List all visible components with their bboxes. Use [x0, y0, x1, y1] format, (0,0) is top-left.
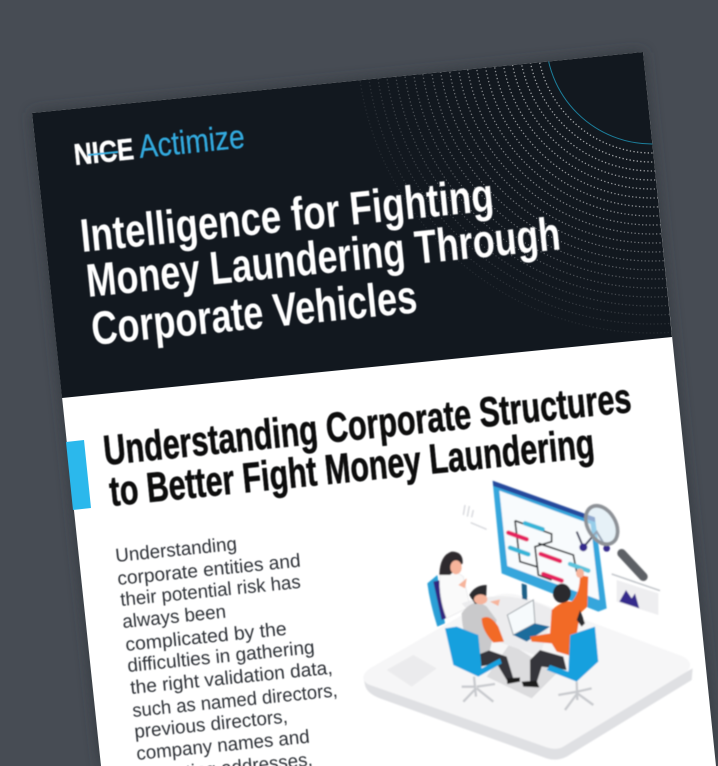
body text: difficulties in gathering: [126, 637, 316, 677]
body text: previous directors,: [133, 707, 289, 743]
body text: their potential risk has: [119, 572, 302, 611]
platform: [363, 594, 693, 760]
monitor: [493, 481, 610, 612]
body text: corporate entities and: [116, 551, 302, 590]
person: man in gray: [462, 585, 520, 684]
body text: the right validation data,: [129, 658, 333, 699]
side chart card: [612, 574, 660, 615]
body text: [114, 534, 338, 766]
person: woman on left: [427, 552, 470, 627]
title: Corporate Vehicles: [89, 269, 419, 355]
illustration: team meeting: [363, 481, 693, 760]
body text: complicated by the: [124, 619, 288, 656]
flowchart: [515, 521, 577, 580]
logo: [72, 118, 246, 172]
title: [78, 168, 563, 355]
body text: company names and: [135, 727, 311, 765]
title: Money Laundering Through: [84, 207, 563, 307]
body text: always been: [121, 602, 227, 633]
panel: dark header: [32, 52, 672, 398]
logo: Actimize: [137, 118, 246, 165]
body text: such as named directors,: [131, 680, 338, 722]
chair: front left: [445, 627, 502, 702]
chair: front right: [547, 627, 598, 710]
table and laptop: [462, 596, 553, 657]
accent bar: [66, 440, 91, 510]
icon: magnifying glass: [579, 500, 643, 577]
monitor nodes: [577, 532, 607, 548]
title: Intelligence for Fighting: [78, 168, 496, 262]
decorative chart marks: [463, 505, 487, 529]
person: man in orange: [522, 569, 588, 687]
logo: NICE: [72, 133, 135, 172]
dotted arc pattern: [360, 62, 672, 334]
body text: Understanding: [114, 534, 238, 567]
